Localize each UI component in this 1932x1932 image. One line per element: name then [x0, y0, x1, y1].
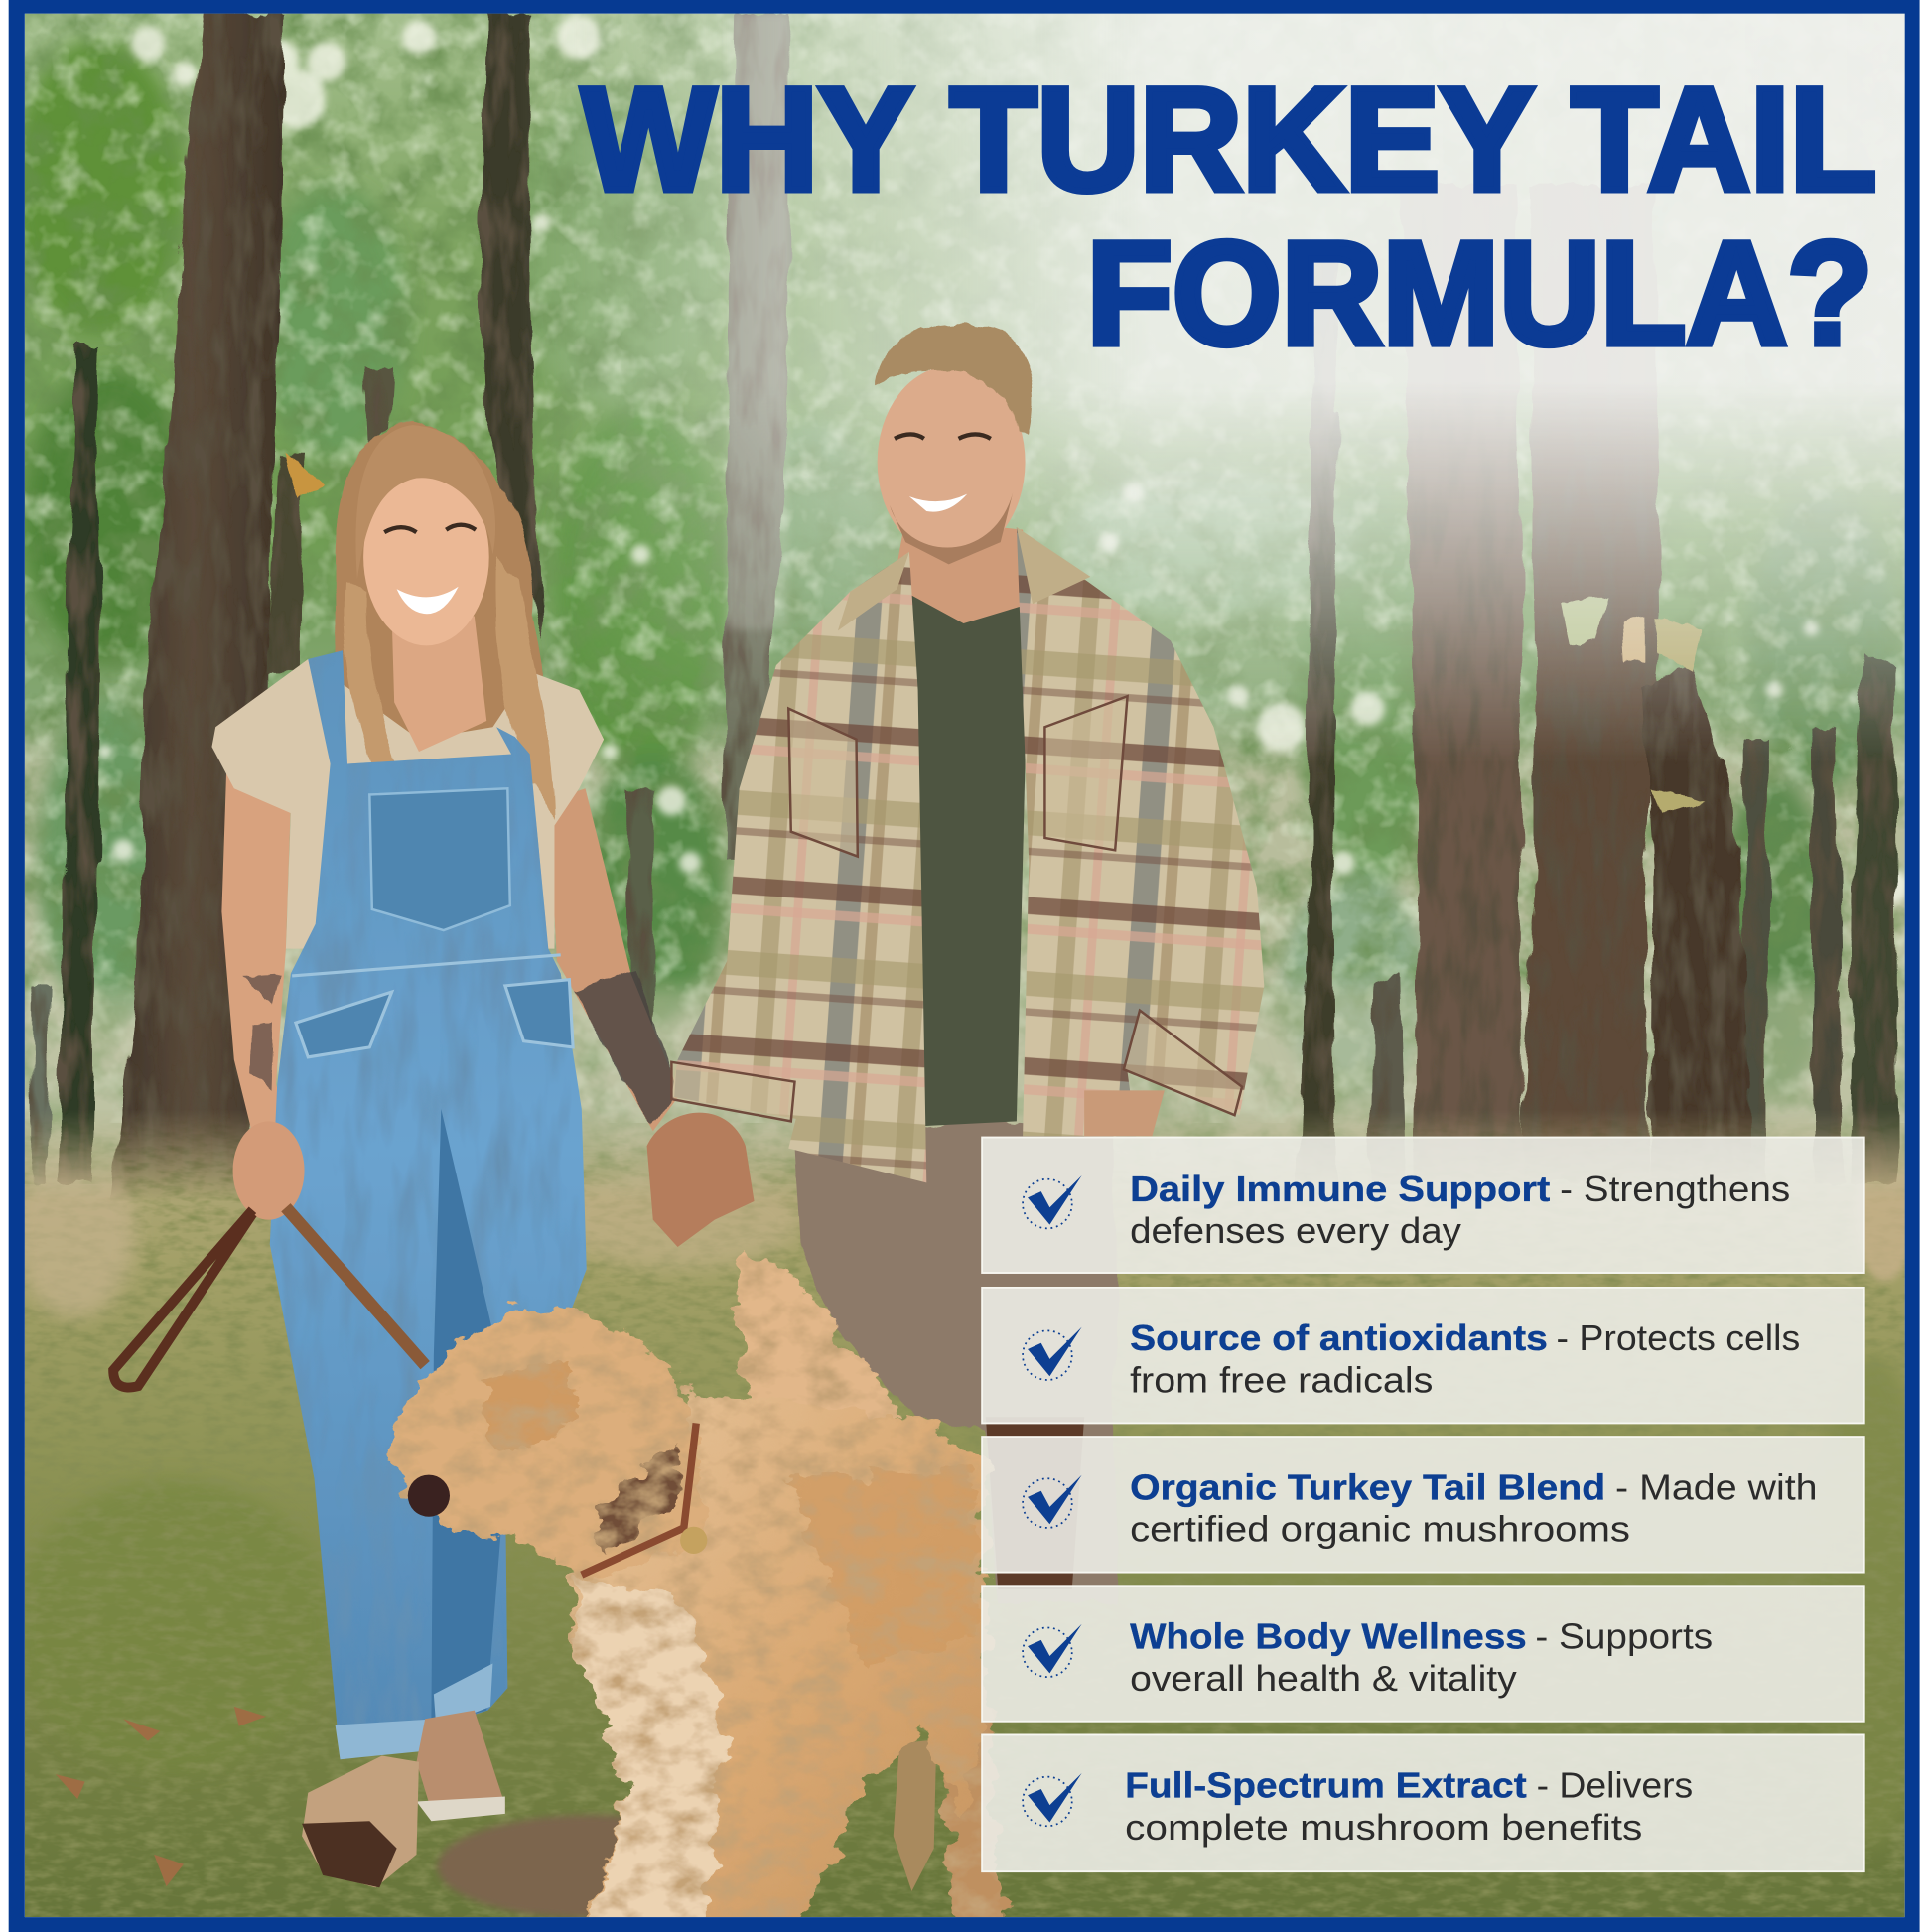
benefit panel: source of antioxidants [982, 1288, 1864, 1423]
benefit panel: daily immune support: defenses every day [1130, 1210, 1461, 1251]
benefit panel: daily immune support: - Strengthens [1560, 1169, 1790, 1209]
beard [890, 492, 1013, 564]
forest backdrop [12, 14, 1908, 1246]
back shading [788, 1466, 980, 1663]
icon: check badge [1023, 1624, 1082, 1677]
benefit panel: organic turkey tail blend: certified organic mushrooms [1130, 1509, 1630, 1550]
title [582, 58, 1876, 375]
overalls [270, 650, 587, 1759]
left arm [221, 763, 293, 1140]
dog collar [582, 1423, 696, 1575]
plaid shirt left [671, 552, 926, 1182]
hair [335, 421, 558, 828]
title: FORMULA? [1087, 211, 1872, 375]
dog nose [408, 1475, 450, 1517]
benefit panel: full-spectrum extract: - Delivers [1537, 1765, 1693, 1806]
benefit panel: full-spectrum extract [982, 1734, 1864, 1871]
benefit panel: whole body wellness: Whole Body Wellness [1130, 1616, 1527, 1657]
ear [483, 1361, 579, 1453]
far shoe [894, 1739, 936, 1891]
chest fur [579, 1578, 727, 1932]
hair [875, 324, 1035, 438]
golden retriever dog [387, 1244, 1004, 1932]
icon: check badge [1023, 1773, 1082, 1826]
title: WHY TURKEY TAIL [582, 58, 1876, 221]
icon: check badge [1023, 1175, 1082, 1228]
benefit panel: whole body wellness: overall health & vitality [1130, 1658, 1517, 1699]
shirt pockets and cuffs [671, 696, 1242, 1121]
benefit panel: whole body wellness: - Supports [1535, 1616, 1713, 1657]
body [569, 1392, 986, 1932]
woman [113, 421, 680, 1887]
arm tattoo [574, 971, 678, 1124]
sunlit treeline glow at the horizon [25, 986, 1905, 1182]
icon: check badge [1023, 1475, 1082, 1528]
benefit panel: full-spectrum extract: Full-Spectrum Extract [1125, 1765, 1527, 1806]
clasped hands [647, 1113, 755, 1247]
grass and path [12, 1097, 1932, 1918]
hair front strands [345, 554, 554, 819]
tree trunks [32, 14, 1897, 1307]
right arm [548, 788, 680, 1131]
fog overlay behind title [517, 0, 1922, 763]
icon: check badge [1023, 1327, 1082, 1380]
undershirt [894, 586, 1029, 1126]
dog tag [680, 1527, 707, 1554]
overalls bib pocket [369, 788, 510, 930]
hair top [355, 425, 495, 579]
benefit panel: daily immune support: Daily Immune Support [1130, 1169, 1550, 1209]
t-shirt [211, 659, 604, 949]
light shaft [727, 14, 788, 629]
benefit panel: source of antioxidants: Source of antioxidants [1130, 1317, 1548, 1358]
neck shadow [598, 1442, 684, 1559]
shoes [416, 1711, 505, 1819]
benefit panel: whole body wellness [982, 1586, 1864, 1722]
leash [286, 1207, 425, 1365]
benefit panel: full-spectrum extract: complete mushroom benefits [1125, 1807, 1642, 1848]
far leg [936, 1676, 1004, 1932]
benefit panel: daily immune support [982, 1138, 1864, 1273]
neck [894, 517, 1029, 623]
benefit panel: source of antioxidants: - Protects cells [1556, 1317, 1800, 1358]
benefit panel: organic turkey tail blend [982, 1437, 1864, 1573]
tail [738, 1244, 901, 1420]
leaves on right trunks [283, 450, 1707, 813]
benefit panel: source of antioxidants: from free radicals [1130, 1359, 1433, 1400]
benefit panel: organic turkey tail blend: - Made with [1615, 1466, 1818, 1507]
head [387, 1307, 705, 1580]
eyes and smile [384, 525, 476, 532]
plaid shirt right [1017, 527, 1264, 1136]
benefit panel: organic turkey tail blend: Organic Turkey Tail Blend [1130, 1466, 1605, 1507]
hand holding leash [233, 1121, 305, 1220]
shirt collar [838, 527, 1090, 630]
face [363, 469, 489, 645]
man hand in pocket [1084, 1090, 1165, 1136]
trousers [794, 1119, 1115, 1601]
man [647, 324, 1264, 1891]
eyes and smile [895, 434, 991, 439]
neck [392, 617, 486, 752]
head [878, 366, 1026, 558]
overalls seams and shading [292, 955, 573, 1057]
